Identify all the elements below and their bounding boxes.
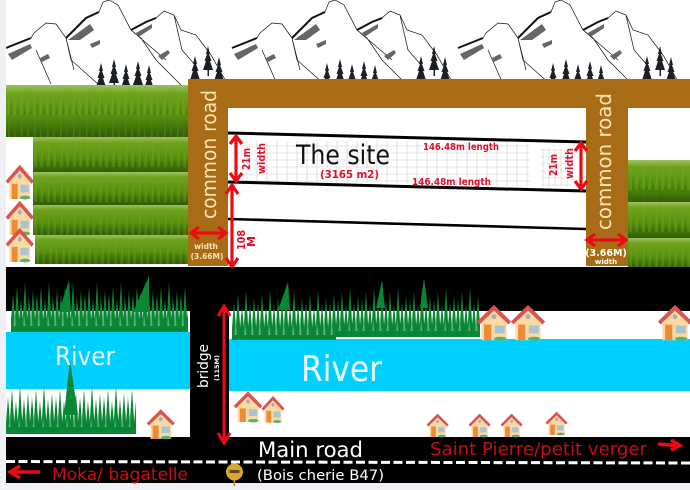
- reeds: middle: [232, 280, 336, 340]
- bridge label: bridge: [196, 344, 212, 388]
- direction label: Saint Pierre: Saint Pierre/petit verger: [430, 439, 648, 460]
- site width label right: 21m: [548, 154, 560, 176]
- distance label 108 M: M: [246, 236, 258, 247]
- grass field: right rows: [628, 160, 690, 270]
- right road width label: width: [595, 258, 617, 266]
- arrow: left road width: [191, 227, 226, 239]
- reeds: bottom left: [6, 360, 136, 434]
- common road label right: common road: [592, 93, 616, 230]
- river right: [229, 339, 690, 391]
- plot boundary lines: [228, 133, 586, 229]
- right river bank: [229, 311, 690, 437]
- right road width label: (3.66M): [585, 248, 627, 259]
- reeds: top left: [11, 272, 197, 332]
- main road label: Main road: [258, 438, 363, 462]
- bridge length label: (115M): [213, 355, 221, 381]
- river label left: River: [55, 342, 115, 372]
- main road centre dashes: [6, 462, 690, 463]
- mountains with pine trees: [6, 0, 677, 85]
- arrow: towards Moka: [10, 466, 40, 478]
- site grid: [232, 141, 570, 186]
- length label bottom: 146.48m length: [412, 177, 491, 188]
- left road width label: (3.66M): [191, 252, 223, 261]
- site width label left: [241, 143, 268, 174]
- right road width label: [585, 248, 627, 266]
- common road: [188, 79, 690, 266]
- black ground and main road: [6, 267, 690, 483]
- river label right: River: [301, 349, 382, 390]
- houses: along river: [147, 305, 690, 439]
- length label top: 146.48m length: [423, 142, 499, 153]
- arrow: 108 M distance: [226, 185, 238, 267]
- road name label: (Bois cherie B47): [257, 468, 384, 484]
- grass field: left rows: [33, 137, 188, 264]
- houses: left stack: [6, 165, 34, 262]
- arrow: right road width: [587, 234, 626, 246]
- distance label 108 M: [236, 230, 258, 250]
- arrow: bridge length: [218, 306, 230, 443]
- arrow: site width right: [575, 143, 587, 189]
- left river bank: [6, 311, 190, 437]
- distance label 108 M: 108: [236, 230, 248, 250]
- direction label: Moka: Moka/ bagatelle: [52, 465, 188, 485]
- site width label left: 21m: [241, 148, 253, 170]
- site width label left: width: [256, 143, 268, 174]
- grass field: upper left block: [6, 85, 188, 137]
- left road width label: width: [194, 242, 218, 251]
- site width label right: width: [564, 148, 576, 179]
- icon: bus stop sign: [226, 464, 243, 486]
- river left: [6, 332, 190, 389]
- reeds: right: [336, 278, 480, 337]
- heading: The site: The site: [295, 140, 390, 171]
- left road width label: [191, 242, 223, 261]
- site area label: (3165 m2): [320, 168, 379, 181]
- arrow: site width left: [230, 136, 242, 181]
- common road label left: common road: [197, 90, 221, 219]
- site width label right: [548, 148, 576, 179]
- arrow: towards Saint Pierre: [658, 440, 680, 450]
